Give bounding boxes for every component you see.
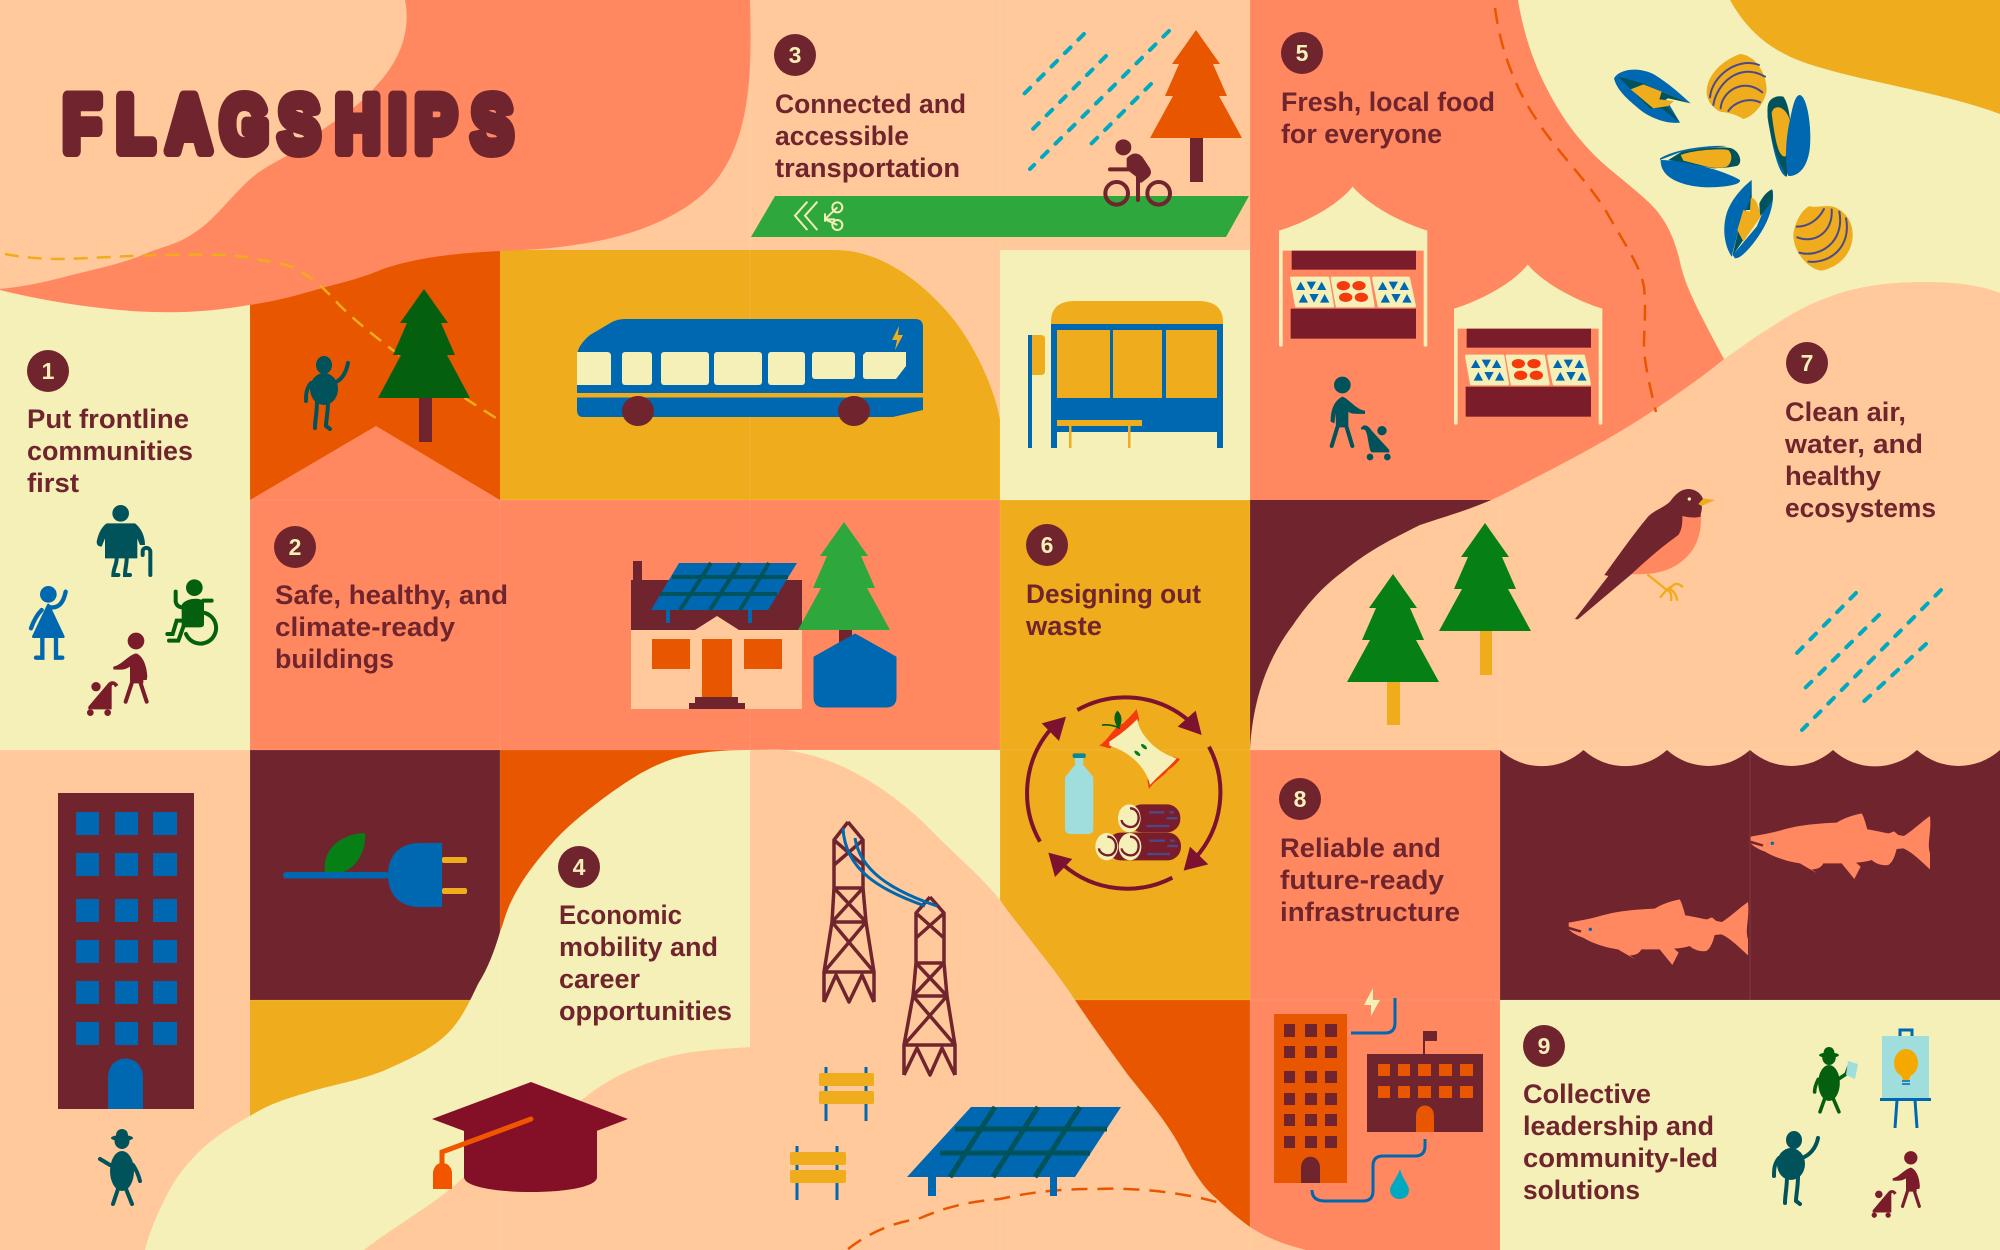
badge 9 [1523,1025,1565,1067]
icon: tower [1274,1014,1347,1183]
dashed path: orange bottom [848,1189,1220,1249]
heading 5: for everyone [1281,119,1442,149]
badge 3: 3 [789,42,801,68]
badge 6 [1026,524,1068,566]
heading 1: communities [27,436,193,466]
icon: person and dark tree [306,289,470,442]
heading 5 [1281,87,1495,149]
heading 7: healthy [1785,461,1881,491]
icon: tree [378,289,470,442]
heading 1 [27,404,193,498]
icon: tree right [1439,523,1531,675]
panel: 3 transportation [577,30,1249,448]
panel: 2 buildings [274,522,896,709]
icon: waving person [1774,1131,1818,1204]
icon: apple core [1099,709,1180,789]
heading 3: Connected and [775,89,966,119]
icon: market stall [1454,265,1602,425]
panel: 1 frontline communities [27,350,216,716]
icon: logs [1095,804,1181,860]
icon: water tank [814,634,896,707]
heading 6: Designing out [1026,579,1201,609]
badge 8: 8 [1294,786,1307,812]
icon: salmon lower [1569,899,1748,965]
icon: waste cycle [1027,697,1220,889]
rain [1022,31,1169,169]
heading 7: ecosystems [1785,493,1936,523]
heading 4: Economic [559,900,682,930]
icon: plug and leaf [283,833,467,907]
heading 1: first [27,468,79,498]
heading 9: leadership and [1523,1111,1714,1141]
panel: 6 designing out waste [1025,524,1220,889]
heading 7 [1784,397,1936,523]
icon: transmission towers [824,822,955,1075]
badge 4: 4 [573,854,586,880]
icon: person with stroller [1872,1151,1920,1218]
icon: salmon upper [1751,813,1930,879]
panel: 8 infrastructure [1274,778,1483,1201]
icon: people group [31,505,216,716]
badge 4 [558,846,600,888]
heading 2: buildings [275,644,394,674]
panel: 9 collective leadership [1523,1025,1931,1218]
icon: person with hat [100,1129,140,1204]
badge 7 [1786,342,1828,384]
icon: easel with light bulb [1880,1030,1931,1128]
panel: 5 local food [1279,32,1602,460]
panel: 4 economic mobility [432,846,732,1192]
heading 4: mobility and [559,932,718,962]
icon: water drop [1390,1169,1409,1199]
heading 4 [559,900,732,1026]
icon: solar panel [907,1107,1121,1196]
heading 1: Put frontline [27,404,189,434]
icon: mussels and clams [1614,54,1853,271]
icon: green tree [798,522,890,645]
badge 8 [1279,778,1321,820]
heading 3: transportation [775,153,960,183]
heading 8: Reliable and [1280,833,1441,863]
bike lane [751,196,1249,237]
icon: waving person [306,356,348,429]
icon: graduation cap [432,1082,628,1192]
heading 4: career [559,964,640,994]
icon: cyclist [1105,139,1170,205]
heading 2: Safe, healthy, and [275,580,508,610]
heading 8: future-ready [1280,865,1444,895]
heading 8: infrastructure [1280,897,1460,927]
badge 9: 9 [1538,1033,1550,1059]
heading 2 [275,580,508,674]
heading 3: accessible [775,121,909,151]
badge 5: 5 [1296,40,1309,66]
badge 2 [274,526,316,568]
badge 3 [774,34,816,76]
icon: orange tree [1150,30,1242,182]
icon: bottle [1065,753,1093,834]
dashed path: yellow [5,254,496,418]
badge 1 [27,350,69,392]
icon: school [1367,1031,1483,1132]
icon: person with stroller [1331,377,1391,460]
icon: bus stop [1028,301,1223,448]
panel: 7 clean air and water [1347,342,1941,965]
badge 2: 2 [289,534,301,560]
badge 5 [1281,32,1323,74]
heading 6: waste [1025,611,1102,641]
dashed path: orange right [1495,8,1656,412]
heading 4: opportunities [559,996,732,1026]
icon: house with solar roof [631,561,802,709]
heading 6 [1025,579,1201,641]
icon: electric bus [577,319,923,426]
heading 8 [1280,833,1460,927]
badge 6: 6 [1041,532,1053,558]
heading 9: community-led [1523,1143,1718,1173]
heading 9: solutions [1523,1175,1640,1205]
icon: tree left [1347,574,1439,725]
rain [1793,590,1941,730]
heading 3 [775,89,966,183]
icon: market stall [1279,187,1427,347]
badge 1: 1 [42,358,55,384]
icon: robin [1574,489,1715,619]
heading 7: Clean air, [1785,397,1906,427]
icon: benches [790,1067,874,1200]
heading 9 [1523,1079,1718,1205]
heading 9: Collective [1523,1079,1651,1109]
icon: tall apartment building [58,793,194,1109]
heading 5: Fresh, local food [1281,87,1495,117]
heading 7: water, and [1784,429,1923,459]
title: FLAGSHIPS [63,81,513,169]
icon: utility pipes [1312,998,1425,1201]
icon: lightning bolt [1364,988,1380,1016]
heading 2: climate-ready [275,612,455,642]
badge 7: 7 [1801,350,1813,376]
icon: person with hat and paper [1815,1047,1858,1112]
